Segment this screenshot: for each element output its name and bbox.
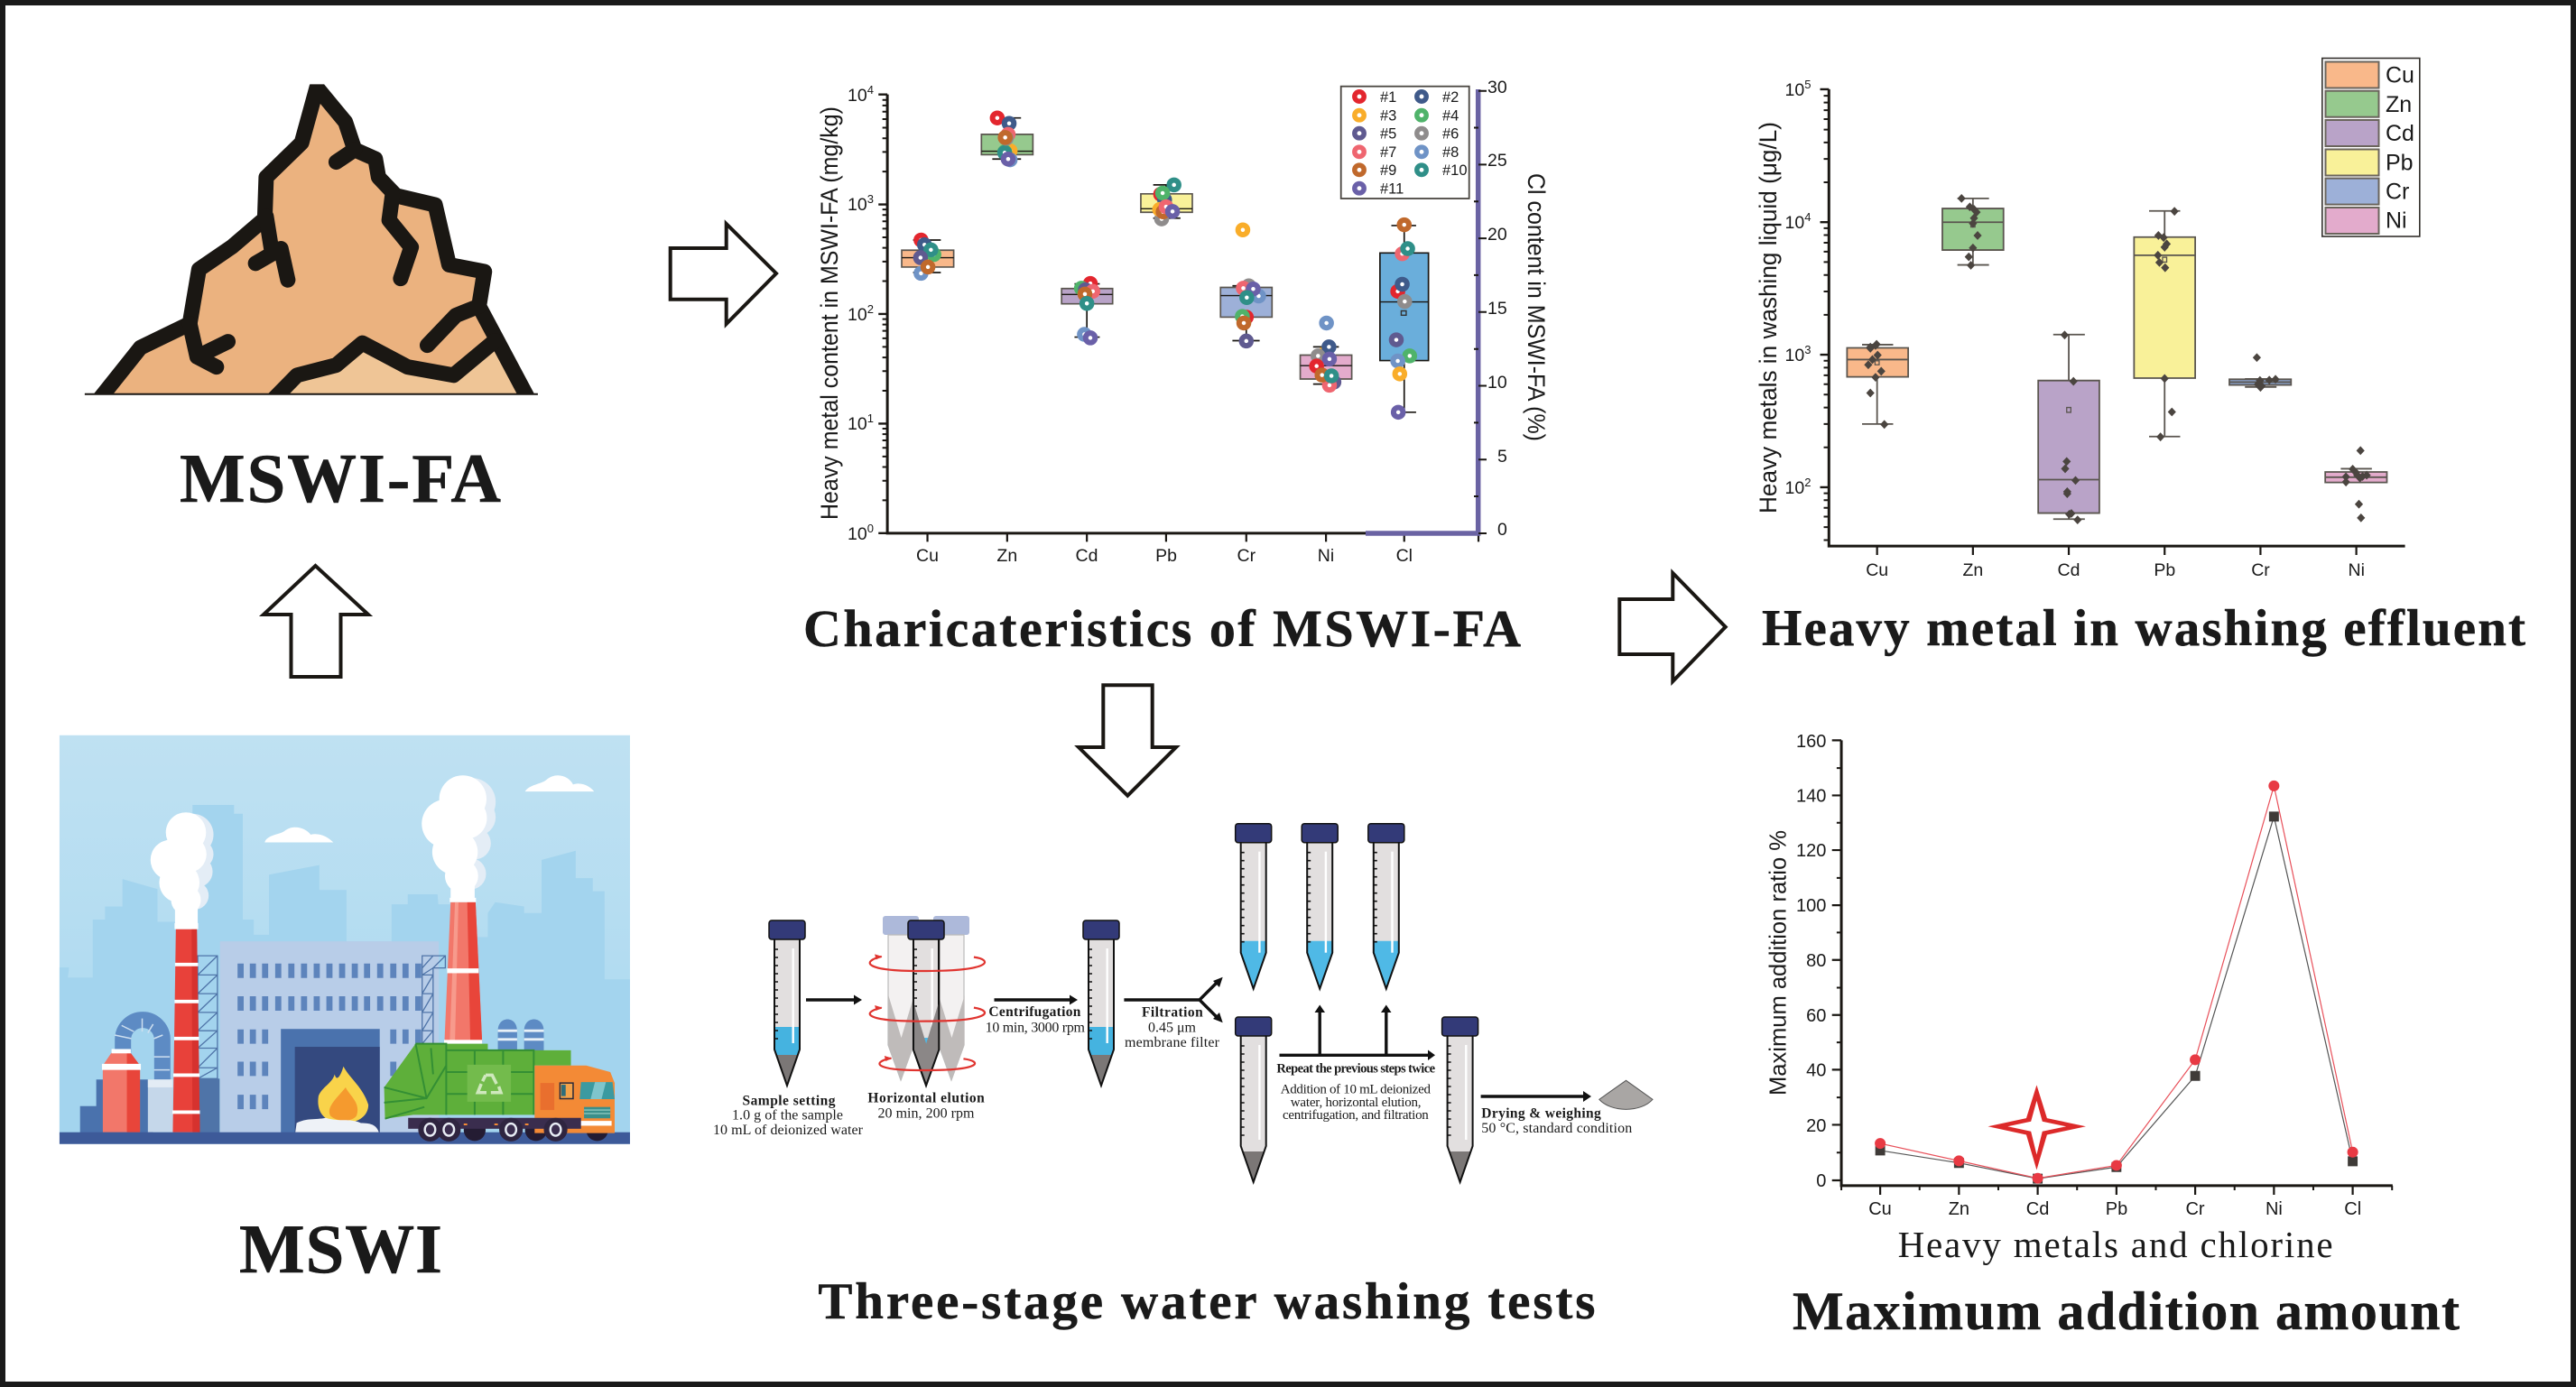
legend: metals: Zn [2386, 92, 2412, 117]
icon: red star on Cd [1988, 1085, 2086, 1170]
axis labels: Cu [1866, 560, 1888, 580]
process flow: three-stage water washing [713, 824, 1653, 1182]
axis labels: 10 [848, 86, 867, 106]
heading: maximum addition amount: Maximum addition amount [1793, 1281, 2460, 1341]
illustration: incineration plant and garbage truck [60, 735, 630, 1144]
axis labels: 30 [1487, 78, 1507, 97]
axis labels: 10 [848, 195, 867, 215]
axis labels: 1 [867, 411, 874, 425]
heading: MSWI: MSWI [239, 1210, 442, 1288]
legend: samples [1341, 87, 1469, 199]
data points: samples 1 to 11 [916, 113, 1414, 417]
axis labels: Cd [2058, 560, 2080, 580]
heading: characteristics of MSWI-FA: Charicateristics of MSWI-FA [803, 599, 1521, 658]
legend: samples: #5 [1380, 126, 1396, 143]
legend: metals: Cr [2386, 179, 2409, 204]
labels: process steps: 10 mL of deionized water [713, 1123, 864, 1138]
legend: samples: #9 [1380, 162, 1396, 179]
axis labels: 10 [1785, 80, 1804, 100]
arrow: characteristics to washing tests [1079, 685, 1176, 796]
series: black squares [1876, 811, 2358, 1184]
axis labels: 60 [1806, 1006, 1826, 1026]
axis labels: Cd [2026, 1199, 2049, 1219]
axis labels: Cl content in MSWI-FA (%) [1523, 173, 1550, 441]
axis labels: Cu [1868, 1199, 1892, 1219]
axis labels: 10 [1785, 346, 1804, 365]
axis labels: 3 [1804, 343, 1811, 356]
box plots with data points [1847, 194, 2386, 524]
axis labels: Cr [2251, 560, 2270, 580]
tube: residue [1236, 1017, 1272, 1182]
axis labels: Ni [2348, 560, 2365, 580]
labels: process steps: centrifugation, and filtration [1283, 1108, 1429, 1123]
legend: metals: Cd [2386, 121, 2414, 146]
labels: process steps: 10 min, 3000 rpm [986, 1020, 1086, 1035]
axis labels: Pb [2106, 1199, 2127, 1219]
arrows between steps [806, 977, 1591, 1102]
chart: maximum addition ratio [1764, 732, 2393, 1265]
axis labels: 0 [867, 522, 874, 535]
icon: MSWI-FA ash mountain [85, 88, 538, 400]
labels: process steps: 50 °C, standard condition [1481, 1121, 1632, 1136]
tube: after centrifugation [1083, 920, 1119, 1086]
right axis [1366, 89, 1487, 533]
legend: metals: Cu [2386, 63, 2414, 88]
heading: MSWI-FA: MSWI-FA [180, 439, 501, 517]
axis labels: 0 [1497, 520, 1507, 540]
axis labels: Cr [2185, 1199, 2205, 1219]
tube: final residue [1442, 1017, 1478, 1182]
axis labels: 10 [848, 305, 867, 325]
chart: heavy metal and Cl content in MSWI-FA [816, 78, 1550, 566]
box plots [902, 118, 1429, 412]
axis labels: 25 [1487, 151, 1507, 171]
axis labels: Ni [2266, 1199, 2283, 1219]
labels: process steps: Centrifugation [988, 1004, 1081, 1020]
legend: samples: #6 [1442, 126, 1459, 143]
arrow: MSWI to MSWI-FA [264, 566, 368, 677]
labels: process steps: Horizontal elution [867, 1091, 985, 1106]
axis labels: 10 [848, 524, 867, 544]
axis labels: 120 [1796, 841, 1826, 861]
tubes: horizontal elution with rotation [870, 916, 985, 1086]
arrow: characteristics to washing effluent [1619, 573, 1726, 681]
axis labels: 5 [1497, 447, 1507, 467]
axis labels: Zn [1949, 1199, 1969, 1219]
axis labels: 80 [1806, 951, 1826, 971]
axes and ticks [1832, 740, 2393, 1195]
axis labels: 3 [867, 192, 874, 206]
labels: process steps: Drying & weighing [1481, 1105, 1601, 1121]
legend: samples: #10 [1442, 162, 1468, 179]
axis labels: 4 [1804, 210, 1811, 224]
x axis title: Heavy metals and chlorine [1898, 1224, 2333, 1265]
legend: metals: Ni [2386, 208, 2407, 233]
labels: process steps: 20 min, 200 rpm [877, 1105, 975, 1121]
labels: process steps: 1.0 g of the sample [732, 1108, 843, 1123]
tube: sample setting [769, 920, 805, 1086]
labels: process steps [713, 1004, 1632, 1138]
legend: samples: #4 [1442, 108, 1459, 125]
axis labels: Zn [996, 546, 1017, 566]
axis labels: 100 [1796, 896, 1826, 916]
axis labels [816, 78, 1550, 566]
axis labels: Heavy metals in washing liquid (μg/L) [1755, 122, 1782, 513]
labels: process steps: Filtration [1142, 1005, 1203, 1021]
series: red circles [1875, 781, 2358, 1184]
legend: metals: Pb [2386, 150, 2414, 175]
legend: samples: #7 [1380, 144, 1396, 161]
labels: process steps: Repeat the previous steps twice [1276, 1061, 1436, 1076]
labels: process steps: Addition of 10 mL deionized [1281, 1083, 1432, 1097]
axis labels: Pb [2154, 560, 2175, 580]
axis labels: Zn [1963, 560, 1983, 580]
icon: dried residue pile [1599, 1080, 1653, 1109]
labels: process steps: 0.45 μm [1148, 1020, 1197, 1035]
labels: process steps: membrane filter [1125, 1035, 1220, 1050]
arrow: MSWI-FA to characteristics [671, 224, 776, 324]
axis labels: 10 [848, 414, 867, 434]
axis labels [1755, 78, 2365, 580]
tube: filtrate 2 [1302, 824, 1338, 989]
heading: heavy metal in washing effluent: Heavy metal in washing effluent [1762, 600, 2525, 657]
chart: heavy metals in washing liquid [1755, 58, 2420, 580]
axis labels: 10 [1487, 373, 1507, 393]
labels: process steps: Sample setting [742, 1093, 836, 1108]
axis labels: Cd [1076, 546, 1098, 566]
axis labels: Ni [1318, 546, 1334, 566]
axis labels: Cu [916, 546, 939, 566]
axis labels: 40 [1806, 1061, 1826, 1081]
axis labels: 15 [1487, 299, 1507, 319]
legend: samples: #11 [1380, 180, 1404, 197]
axis labels: 4 [867, 83, 874, 97]
legend: samples: #8 [1442, 144, 1459, 161]
axes and ticks [1821, 89, 2405, 555]
axis labels: 20 [1806, 1116, 1826, 1136]
y axis ticks and x axis [878, 95, 1478, 541]
axis labels: 20 [1487, 225, 1507, 245]
axis labels: Cr [1237, 546, 1256, 566]
axis labels [1764, 732, 2361, 1219]
axis labels: Cl [2344, 1199, 2361, 1219]
legend: samples: #1 [1380, 89, 1396, 106]
axis labels: 10 [1785, 213, 1804, 233]
axis labels: 0 [1816, 1171, 1826, 1191]
legend: metals [2322, 58, 2420, 236]
labels: process steps: water, horizontal elution, [1291, 1096, 1421, 1110]
axis labels: 10 [1785, 478, 1804, 498]
axis labels: 140 [1796, 787, 1826, 807]
heading: three-stage water washing tests: Three-stage water washing tests [818, 1273, 1595, 1330]
axis labels: Heavy metal content in MSWI-FA (mg/kg) [816, 106, 843, 520]
legend: samples: #2 [1442, 89, 1459, 106]
axis labels: 2 [867, 302, 874, 316]
axis labels: 2 [1804, 476, 1811, 489]
axis labels: Maximum addition ratio % [1764, 830, 1791, 1096]
axis labels: Cl [1396, 546, 1413, 566]
axis labels: 5 [1804, 78, 1811, 91]
axis labels: Pb [1155, 546, 1177, 566]
tube: filtrate 3 [1368, 824, 1404, 989]
legend: samples: #3 [1380, 108, 1396, 125]
tube: filtrate 1 [1236, 824, 1272, 989]
axis labels: 160 [1796, 732, 1826, 752]
